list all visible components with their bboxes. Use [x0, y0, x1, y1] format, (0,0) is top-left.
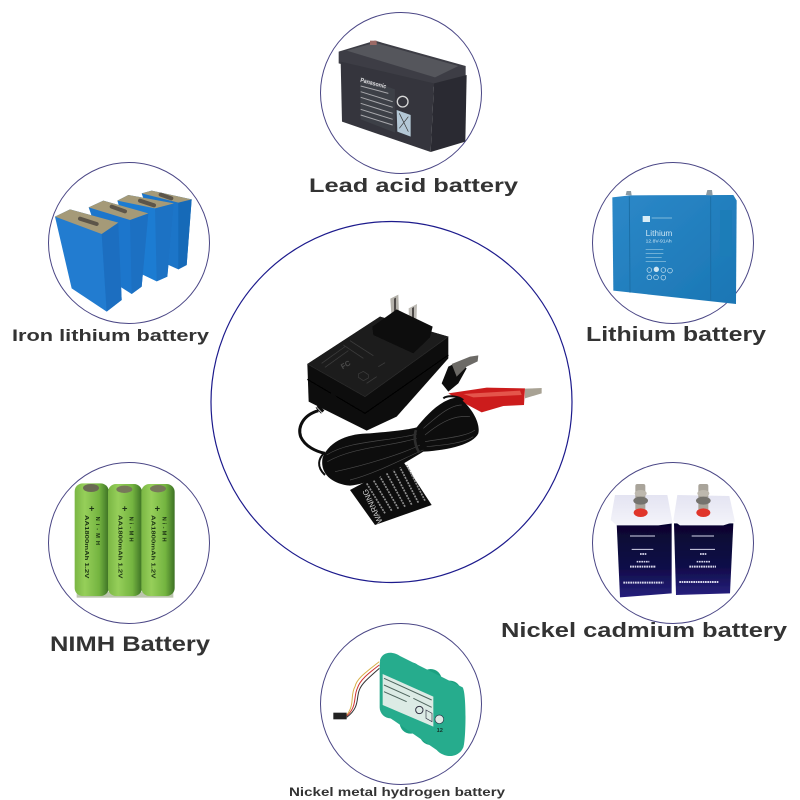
icon: charger with clips and coiled cable — [300, 295, 542, 525]
panel: lead acid battery — [309, 12, 518, 197]
panel: nickel metal hydrogen battery — [289, 624, 505, 799]
panel: NIMH battery — [48, 462, 210, 656]
adapter body — [307, 317, 448, 431]
plug prongs — [390, 295, 399, 319]
warning tag: WARNING — [361, 488, 384, 525]
icon: three green AA cells: AA1800mAh 1.2V — [150, 515, 156, 579]
icon: blue lithium battery: 12.8V-91Ah — [646, 239, 672, 244]
icon: three green AA cells: Ni-MH — [127, 517, 133, 542]
icon: three green AA cells: Ni-MH — [161, 517, 167, 542]
red clip — [448, 388, 525, 412]
icon: blue lithium battery — [612, 190, 737, 304]
label: Nickel cadmium battery — [501, 620, 788, 642]
black clip — [442, 362, 467, 392]
icon: green battery pack with wires: 12 — [437, 728, 443, 734]
icon: three green AA cells: + — [122, 504, 128, 514]
cable strain relief — [318, 395, 335, 411]
plug base — [372, 309, 433, 353]
label: Iron lithium battery — [12, 326, 210, 345]
icon: three green AA cells: + — [155, 504, 161, 514]
label: Lithium battery — [586, 324, 767, 346]
label marks — [322, 341, 385, 383]
icon: lead acid battery — [339, 41, 467, 152]
icon: two nickel cadmium cells — [611, 484, 735, 597]
icon: three green AA cells: + — [89, 504, 95, 514]
icon: green battery pack with wires — [333, 653, 465, 756]
panel: centre charger circle — [211, 222, 572, 582]
label: Lead acid battery — [309, 175, 518, 197]
icon: charger with clips and coiled cable: FC — [339, 358, 353, 371]
panel: iron lithium battery — [12, 162, 210, 345]
icon: lead acid battery: Panasonic — [359, 78, 387, 91]
warning tag — [350, 462, 432, 525]
icon: three green AA cells — [75, 483, 175, 598]
panel: nickel cadmium battery — [501, 462, 788, 642]
icon: three green AA cells: Ni-MH — [94, 517, 100, 545]
icon: three green AA cells: AA1800mAh 1.2V — [116, 515, 122, 579]
coiled cable — [322, 397, 479, 486]
icon: four blue prismatic cells — [55, 191, 192, 312]
icon: three green AA cells: AA1800mAh 1.2V — [83, 515, 89, 579]
icon: blue lithium battery: Lithium — [646, 228, 672, 238]
label: Nickel metal hydrogen battery — [289, 785, 505, 799]
panel: lithium battery — [586, 162, 767, 346]
label: NIMH Battery — [50, 633, 210, 656]
